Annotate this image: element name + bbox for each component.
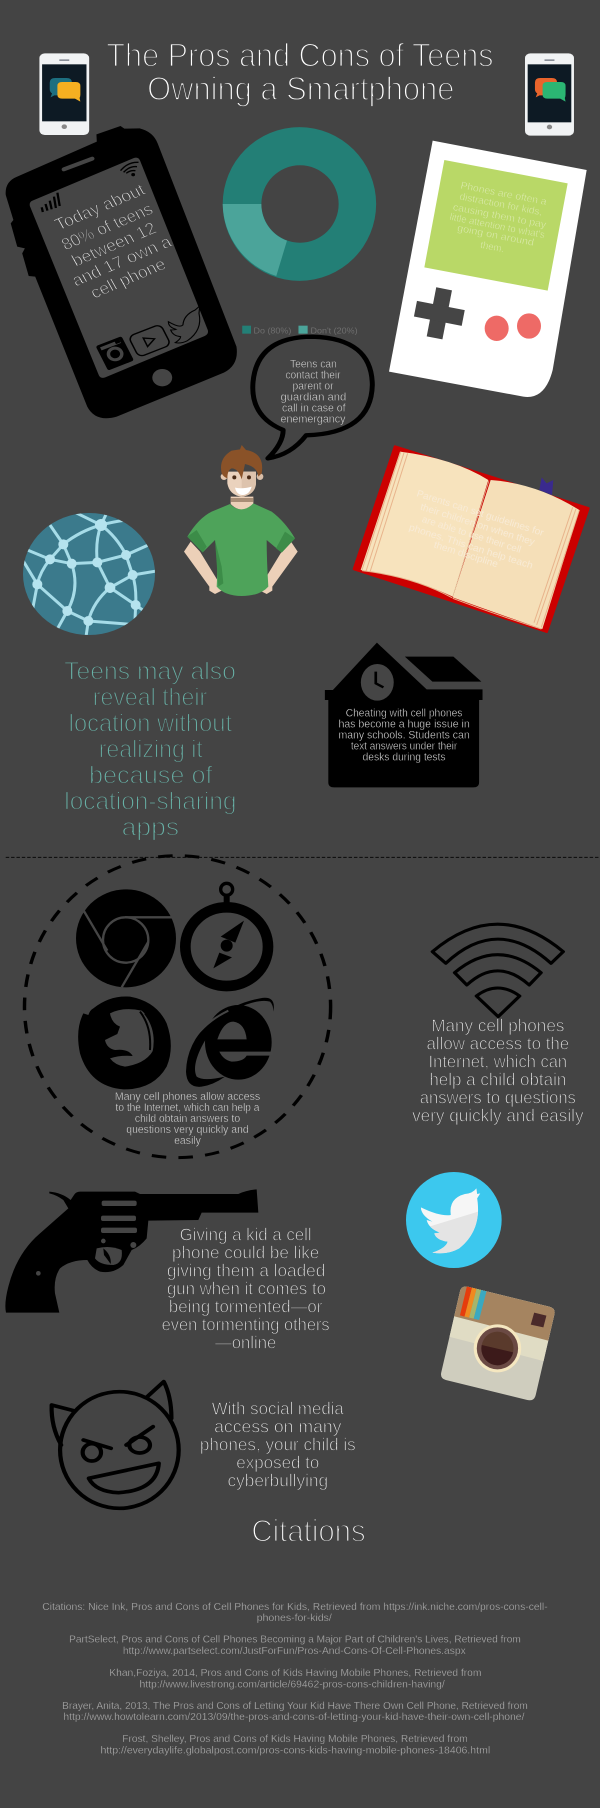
text: cyberbullying (200, 1399, 356, 1490)
section: top (title, phones, donut) (6, 37, 574, 418)
text: contact parent: parent or (293, 381, 334, 392)
text: contact parent: Teens can (290, 359, 337, 370)
heading: citations: Citations (251, 1513, 366, 1548)
text: contact parent: guardian and (280, 392, 346, 403)
title: Owning a Smartphone (147, 70, 454, 107)
text: distraction: causing them to pay (452, 202, 547, 231)
text: loaded gun: being tormented—or (169, 1297, 322, 1316)
text: citation list: PartSelect, Pros and Cons of Cell Phones Becoming a Major Part of Children's Lives, Retrieved from (69, 1635, 521, 1646)
text: location sharing: apps (122, 812, 179, 841)
text: cheating: has become a huge issue in (338, 719, 470, 730)
icon: video glyph (128, 324, 171, 357)
icon: console buttons (485, 313, 541, 341)
text: parents guidelines: their children on when they (419, 502, 536, 548)
text: distraction: Phones are often a (460, 180, 548, 208)
icon: compass (185, 883, 268, 986)
section: browsers and wifi (6, 856, 600, 1158)
panel: open book (354, 447, 588, 632)
console body (389, 141, 587, 397)
text: contact parent (280, 359, 346, 425)
text: 80% of teens: between 12 (68, 219, 160, 270)
text: internet access (circle): easily (174, 1136, 201, 1147)
text: location sharing: reveal their (93, 682, 207, 711)
text: citation list: http://www.livestrong.com/article/69462-pros-cons-children-having/ (139, 1680, 445, 1690)
icon: small phone left (39, 53, 89, 135)
icon: devil face (52, 1382, 179, 1508)
icon: large black phone (6, 126, 237, 418)
dashed circle (24, 856, 331, 1158)
text: citation list: Frost, Shelley, Pros and Cons of Kids Having Mobile Phones, Retrieved from (122, 1734, 468, 1745)
text: citation list (42, 1602, 548, 1756)
book pages (361, 452, 488, 597)
icon: signal bars (42, 193, 60, 212)
title (106, 37, 494, 107)
chart legend: Don't (20%) (311, 326, 358, 335)
section: middle (speech bubble, location, clock house) (64, 337, 483, 841)
panel: game console distraction (389, 141, 587, 397)
text: citation list: Khan,Foziya, 2014, Pros and Cons of Kids Having Mobile Phones, Retrieved from (109, 1668, 481, 1679)
donut chart (223, 127, 376, 281)
text: citation list: http://everydaylife.globalpost.com/pros-cons-kids-having-mobile-phones-18406.html (101, 1746, 490, 1756)
text: cyberbullying: cyberbullying (227, 1471, 328, 1490)
text: internet access (circle) (115, 1092, 260, 1147)
title: The Pros and Cons of Teens (106, 37, 494, 74)
icon: chrome (76, 889, 176, 987)
text: internet access (circle): child obtain answers to (135, 1114, 240, 1125)
text: parents guidelines (407, 488, 546, 572)
book cover (354, 447, 588, 632)
icon: instagram (441, 1286, 555, 1400)
text: location sharing: location without (69, 708, 232, 737)
text: citation list: phones-for-kids/ (257, 1613, 332, 1624)
text: distraction: going on around (456, 223, 535, 249)
console screen (424, 160, 568, 291)
icon: wifi outline (432, 924, 563, 1017)
text: cyberbullying: exposed to (236, 1453, 319, 1472)
icon: twitter (406, 1172, 502, 1268)
text: loaded gun: gun when it comes to (167, 1279, 326, 1298)
text: internet access (circle): Many cell phones allow access (115, 1092, 260, 1103)
text: distraction: them. (479, 240, 505, 255)
text: distraction (449, 180, 548, 255)
text: cheating: Cheating with cell phones (346, 708, 463, 719)
text: parents guidelines: Parents can set guidelines for (415, 488, 546, 539)
text: location sharing: location-sharing (64, 786, 236, 815)
icon: bookmark (539, 477, 553, 495)
text: internet access (right): Many cell phones (431, 1016, 564, 1035)
icon: instagram glyph (96, 336, 134, 371)
text: 80% of teens: and 17 own a (68, 232, 175, 290)
icon: bird glyph (168, 306, 200, 343)
text: internet access (circle): questions very quickly and (126, 1125, 249, 1136)
text: location sharing (64, 656, 236, 841)
text: internet access (right): Internet, which can (429, 1052, 567, 1071)
text: citation list: Brayer, Anita, 2013, The Pros and Cons of Letting Your Kid Have There Own Cell Phone, Retrieved from (62, 1701, 528, 1712)
text: loaded gun: even tormenting others (162, 1315, 330, 1334)
text: location sharing: because of (89, 760, 213, 789)
text: 80% of teens (51, 180, 175, 302)
text: internet access (circle): to the Internet, which can help a (116, 1103, 260, 1114)
speech bubble (253, 337, 372, 458)
text: loaded gun: phone could be like (172, 1243, 319, 1262)
text: loaded gun: giving them a loaded (167, 1261, 325, 1280)
icon: globe network (23, 512, 157, 637)
text: cyberbullying: access on many (214, 1417, 342, 1436)
text: distraction: distraction for kids, (459, 191, 543, 218)
text: 80% of teens: 80% of teens (58, 199, 156, 254)
text: contact parent: enemergancy (280, 414, 346, 425)
chart legend (242, 326, 358, 335)
icon: internet explorer (186, 998, 274, 1087)
icon: firefox (78, 996, 171, 1089)
browser icons (76, 883, 274, 1089)
text: cheating (338, 708, 470, 763)
dashed divider (6, 856, 600, 859)
text: internet access (right) (412, 1016, 584, 1125)
text: citation list: http://www.partselect.com/JustForFun/Pros-And-Cons-Of-Cell-Phones.aspx (123, 1646, 467, 1657)
text: parents guidelines: are able to use their cell (420, 514, 522, 556)
text: parents guidelines: them discipline (432, 540, 499, 570)
text: 80% of teens: cell phone (87, 254, 169, 302)
text: citation list: Citations: Nice Ink, Pros and Cons of Cell Phones for Kids, Retrieved from https://ink.niche.com/pros-cons-cell- (42, 1602, 548, 1613)
text: location sharing: realizing it (99, 734, 203, 763)
illustration: smiling kid (184, 445, 298, 596)
text: contact parent: contact their (285, 370, 341, 381)
chart legend: Do (80%) (254, 326, 291, 335)
icon: revolver (5, 1189, 258, 1313)
text: 80% of teens: Today about (51, 180, 148, 234)
section: social icons, devil (52, 1172, 559, 1508)
text: internet access (right): help a child obtain (429, 1070, 566, 1089)
text: contact parent: call in case of (282, 403, 346, 414)
section: citations (42, 1513, 548, 1756)
text: loaded gun: —online (215, 1333, 276, 1352)
text: cyberbullying: With social media (212, 1399, 344, 1418)
text: loaded gun (162, 1225, 330, 1352)
text: cyberbullying: phones, your child is (200, 1435, 356, 1454)
icon: small phone right (525, 53, 574, 136)
text: cheating: many schools. Students can (338, 730, 470, 741)
icon: wifi on phone (121, 162, 139, 176)
icon: d-pad (411, 284, 468, 343)
text: loaded gun: Giving a kid a cell (180, 1225, 312, 1244)
text: internet access (right): allow access to the (426, 1034, 569, 1053)
text: cheating: desks during tests (363, 752, 446, 763)
text: citation list: http://www.howtolearn.com/2013/09/the-pros-and-cons-of-letting-your-kid-have-their-own-cell-phone/ (63, 1712, 525, 1723)
text: distraction: little attention to what's (449, 212, 546, 241)
text: location sharing: Teens may also (64, 656, 236, 685)
text: cheating: text answers under their (351, 741, 457, 752)
text: parents guidelines: phones. This can help teach (407, 522, 534, 572)
clock house (325, 643, 483, 787)
